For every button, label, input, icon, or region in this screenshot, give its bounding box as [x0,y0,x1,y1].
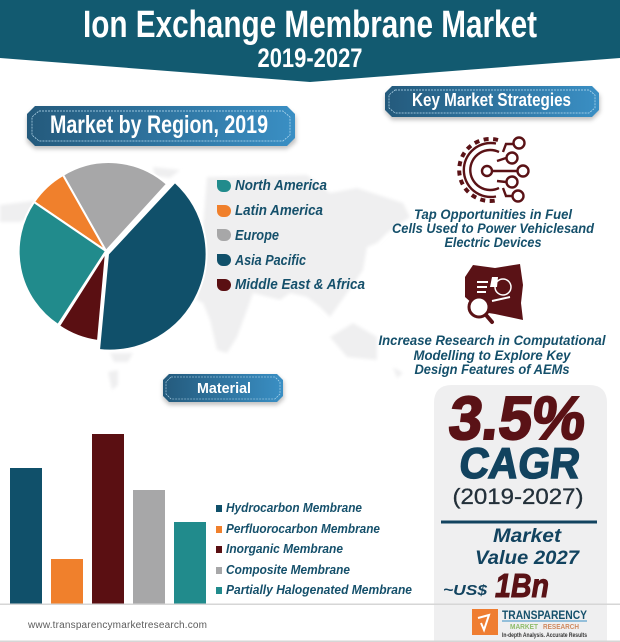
bar: Hydrocarbon [10,468,42,605]
text: strategy one [392,207,595,250]
world map background [0,167,410,390]
legend: Composite: Composite Membrane [226,563,350,577]
heading: Key Market Strategies: Key Market Strategies [412,90,571,110]
title banner [0,0,620,82]
text: strategy one: Tap Opportunities in Fuel [414,207,572,222]
logo: In-depth Analysis. Accurate Results [502,632,587,639]
logo: MARKET [510,622,538,631]
icon: gear network [459,138,528,202]
pie chart [19,162,207,351]
logo [472,608,587,639]
logo: TRANSPARENCY [502,608,587,622]
bar: Inorganic [92,434,124,605]
legend: North America: North America [235,178,327,194]
slice: Europe [63,162,167,251]
legend: Middle East and Africa: Middle East & Africa [235,277,365,293]
text: strategy two: Modelling to Explore Key [414,348,572,363]
legend: Latin America: Latin America [235,203,323,219]
subtitle: 2019-2027 [258,43,362,73]
slice: Middle East and Africa [59,252,106,341]
heading: Key Market Strategies [385,86,600,120]
slice: Latin America [34,175,106,251]
text: strategy two: Increase Research in Computational [378,333,606,348]
panel: CAGR: Value 2027 [475,548,581,569]
text: strategy two: Design Features of AEMs [414,362,570,377]
heading: Material: Material [197,380,251,397]
panel: CAGR: 1Bn [495,567,549,604]
legend: Inorganic: Inorganic Membrane [226,542,343,556]
website: www.transparencymarketresearch.com [27,620,207,631]
heading: Market by Region: Market by Region, 2019 [50,111,268,139]
CAGR period: (2019-2027) [452,484,584,509]
icon: research report [465,264,523,322]
logo: RESEARCH [543,622,579,631]
legend: Perfluorocarbon: Perfluorocarbon Membrane [226,522,380,536]
material legend [216,501,412,597]
legend: Hydrocarbon: Hydrocarbon Membrane [226,501,362,515]
legend: Europe [217,228,279,244]
text: strategy two [378,333,606,377]
bar chart [10,434,206,605]
heading: Market by Region [27,106,296,149]
CAGR label: CAGR [457,440,583,488]
pie legend [217,178,365,293]
legend: Europe: Europe [235,228,279,244]
bar: Composite [133,490,165,605]
text: strategy one: Cells Used to Power Vehiclesand [392,221,595,236]
legend: Asia Pacific: Asia Pacific [234,253,306,269]
legend: Partially Halogenated: Partially Halogenated Membrane [226,583,412,597]
heading: Material [163,374,284,405]
bar: Partially Halogenated [174,522,206,605]
text: strategy one: Electric Devices [444,235,542,250]
slice: Asia Pacific [99,182,207,351]
market value label: Market [493,526,562,547]
bar: Perfluorocarbon [51,559,83,605]
market value: ~US$ [443,582,488,599]
CAGR value: 3.5% [445,384,590,452]
panel: CAGR [434,384,607,641]
slice: North America [19,202,106,325]
